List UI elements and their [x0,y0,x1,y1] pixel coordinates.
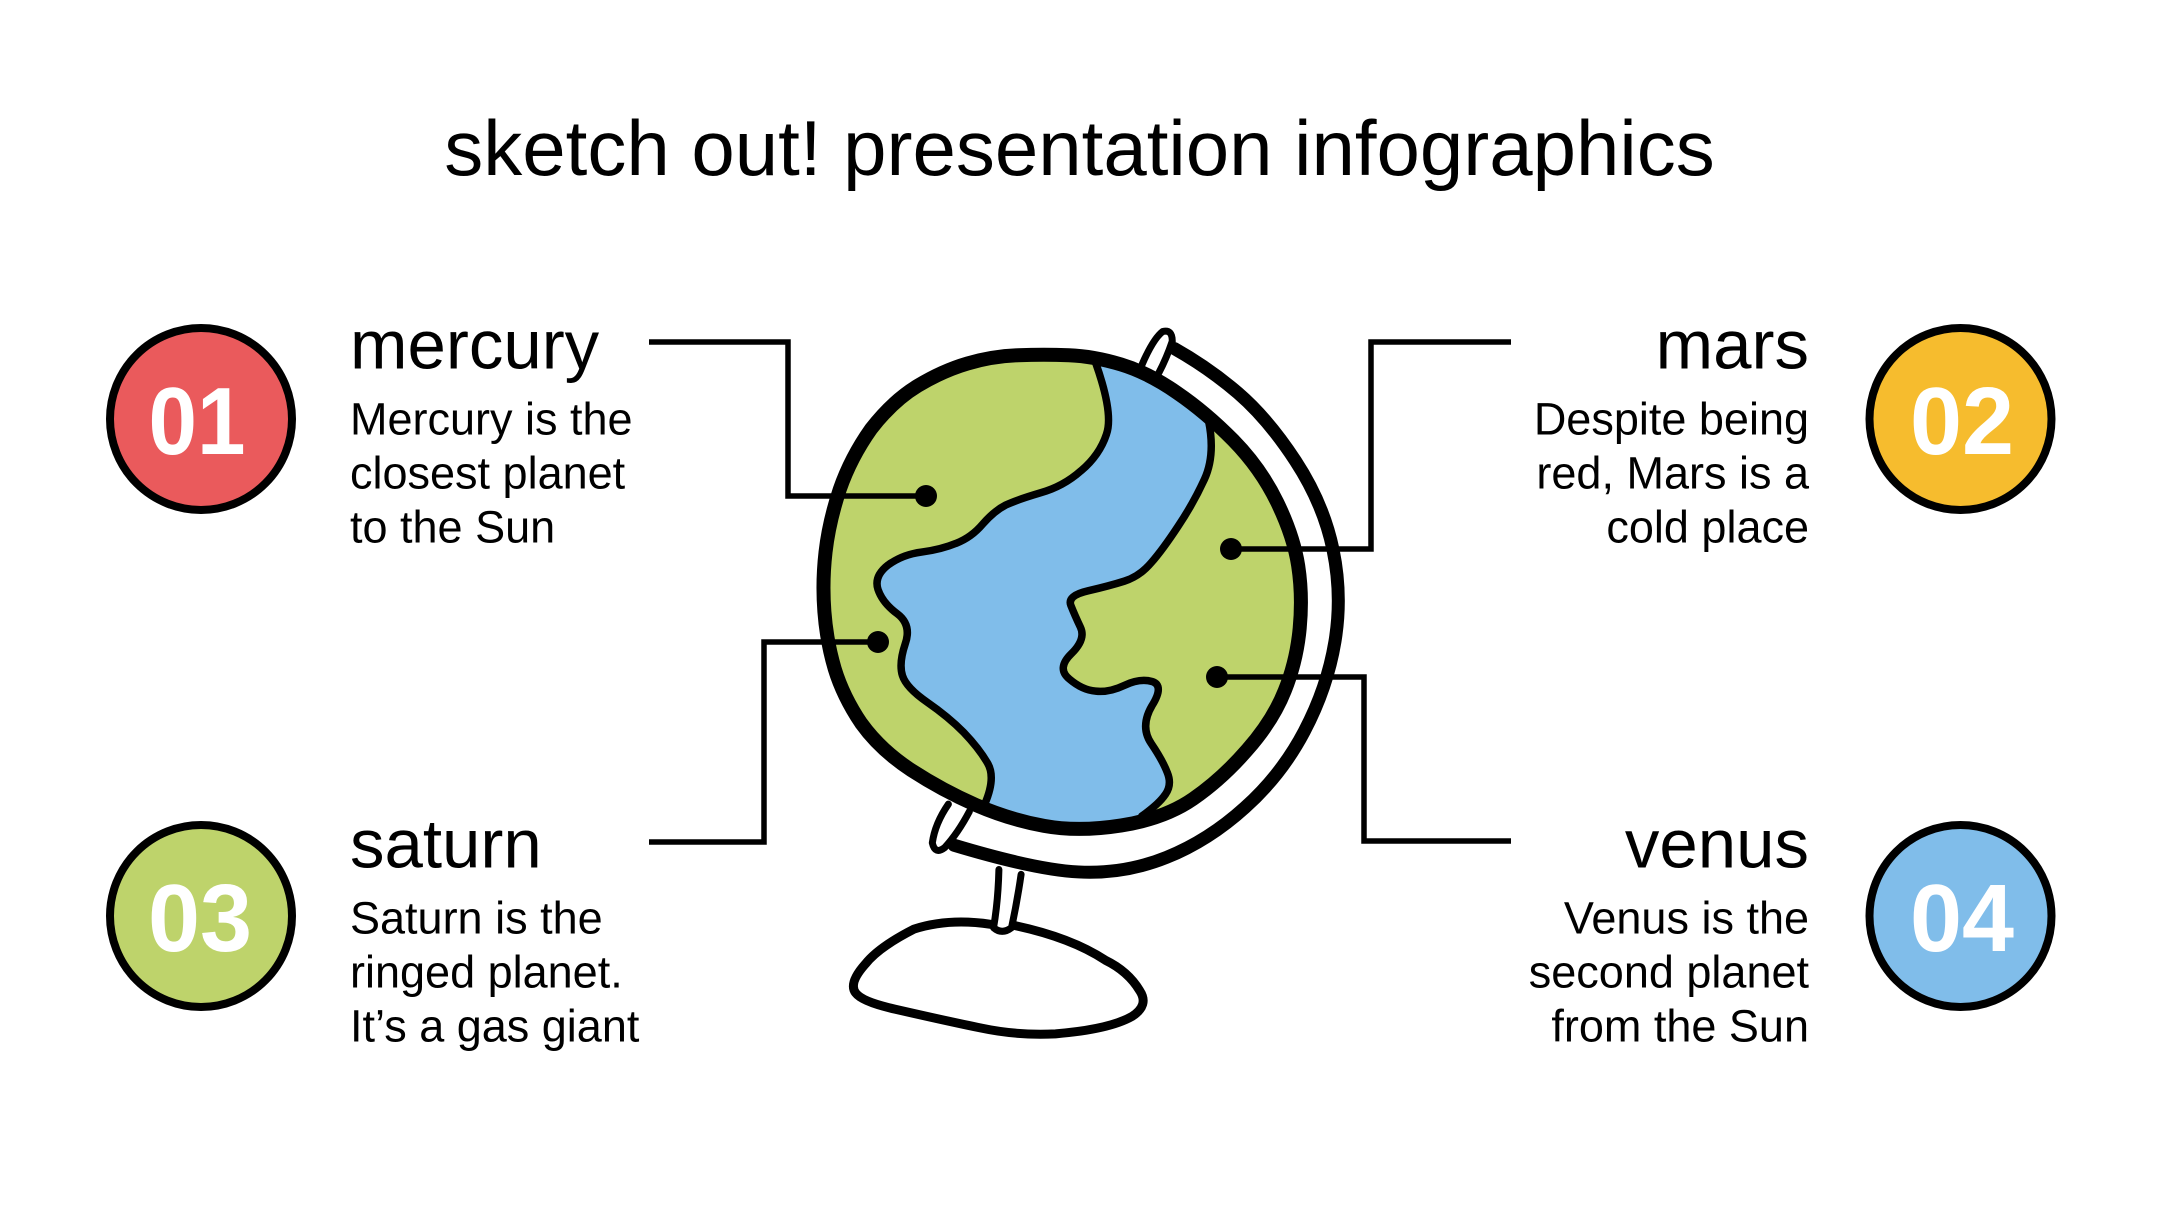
text block: saturn: ringed planet. [350,946,623,998]
text block: mercury: Mercury is the [350,394,633,444]
text block: mercury [350,306,633,552]
illustration: globe [823,331,1338,1034]
leader: mars [1220,342,1511,560]
globe stand [994,870,1021,931]
title: sketch out! presentation infographics [444,104,1715,192]
badge 04: 04 [1910,865,2014,972]
text block: mars: red, Mars is a [1536,448,1810,498]
globe base [853,922,1143,1034]
globe ocean [877,363,1211,828]
badge 02: 02 [1910,368,2014,475]
text block: venus [1529,806,1809,1052]
globe outline [823,355,1301,829]
badge 01 [110,328,292,510]
text block: mars: mars [1656,306,1809,384]
west coastline [877,363,1109,804]
badge 01: 01 [148,368,246,475]
globe ring [954,348,1338,872]
bottom knob [932,804,969,850]
badge 03: 03 [148,865,252,972]
text block: saturn [350,806,640,1052]
text block: mercury: to the Sun [350,502,555,552]
text block: mars [1534,306,1810,552]
badge 03 [110,825,292,1007]
text block: venus: from the Sun [1551,1000,1809,1052]
text block: saturn: saturn [350,806,542,882]
text block: venus: venus [1625,806,1809,882]
leader: venus [1206,666,1511,841]
leader: saturn [649,631,889,842]
text block: venus: second planet [1529,946,1809,998]
text block: venus: Venus is the [1564,892,1809,944]
east coastline [1063,421,1211,816]
text block: mars: Despite being [1534,394,1809,444]
text block: mercury: closest planet [350,448,626,498]
text block: saturn: It’s a gas giant [350,1000,640,1052]
text block: mars: cold place [1606,502,1809,552]
text block: saturn: Saturn is the [350,892,603,944]
badge 02 [1870,328,2052,510]
text block: mercury: mercury [350,306,600,384]
top knob [1142,331,1172,373]
globe land [823,355,1301,829]
badge 04 [1870,825,2052,1007]
leader: mercury [649,342,937,507]
